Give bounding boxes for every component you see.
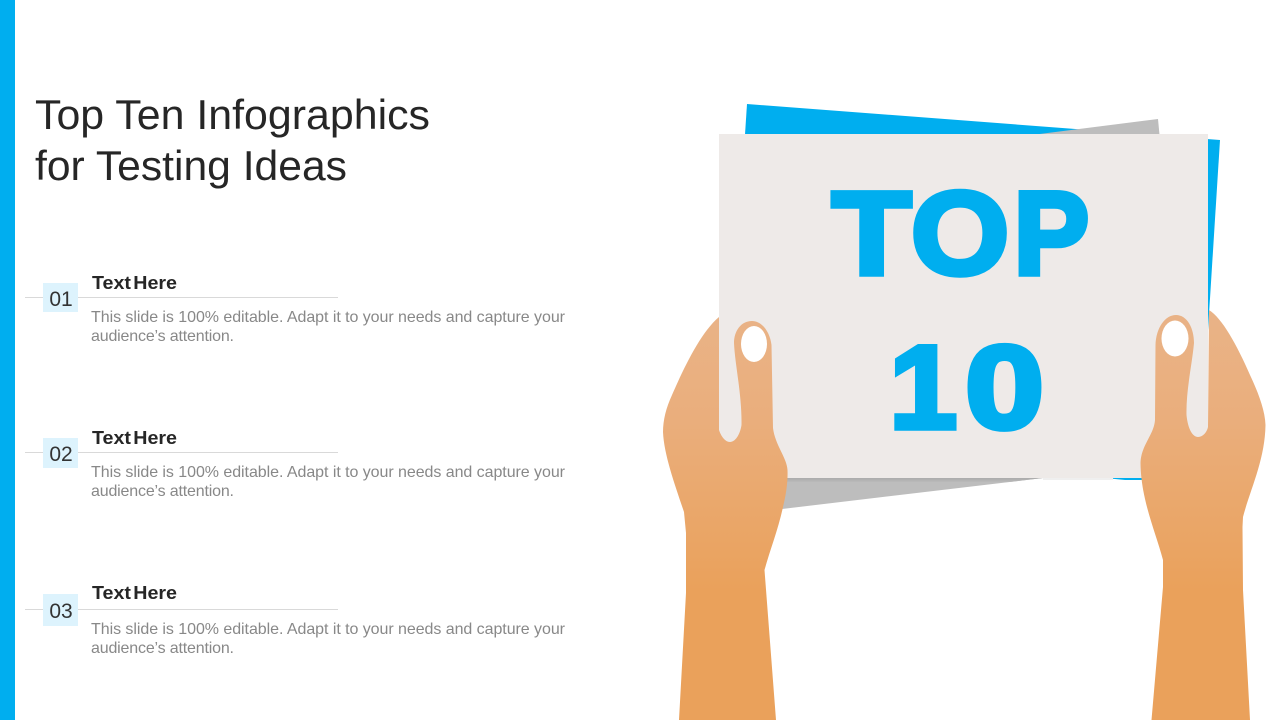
- list item 02: audience’s attention.: [91, 483, 234, 500]
- list item 01: This slide is 100% editable. Adapt it to your needs and capture your: [91, 309, 566, 326]
- list item 01: [25, 272, 566, 345]
- list item 01: Text Here: [92, 272, 177, 293]
- sign text: TOP: [832, 167, 1089, 300]
- list item 03: Text Here: [92, 582, 177, 603]
- blue back sheet: [725, 104, 1220, 480]
- list item 01: 01: [49, 288, 73, 311]
- illustration: hands holding sign: [663, 104, 1266, 720]
- list item 02: Text Here: [92, 427, 177, 448]
- right thumbnail: [1162, 320, 1188, 356]
- right hand: [1140, 310, 1266, 720]
- card shadow: [782, 478, 1043, 482]
- title: for Testing Ideas: [35, 142, 347, 189]
- list item 03: This slide is 100% editable. Adapt it to your needs and capture your: [91, 621, 566, 638]
- left accent bar: [0, 0, 15, 720]
- list item 03: 03: [49, 600, 73, 623]
- list item 02: [25, 427, 566, 500]
- grey back sheet: [760, 119, 1160, 509]
- list item 02: This slide is 100% editable. Adapt it to your needs and capture your: [91, 464, 566, 481]
- sign text: TOP: T: [832, 168, 911, 300]
- list item 03: audience’s attention.: [91, 640, 234, 657]
- list item 02: 02: [49, 443, 73, 466]
- title: Top Ten Infographics: [35, 91, 430, 138]
- sign card: [719, 134, 1208, 478]
- list item 03: [25, 582, 566, 657]
- sign text: TOP: P: [1014, 167, 1089, 300]
- sign text: 10: 1: [890, 323, 957, 454]
- sign text: 10: [890, 321, 1044, 454]
- left hand: [663, 317, 788, 720]
- list item 01: audience’s attention.: [91, 328, 234, 345]
- sign text: 10: 0: [965, 321, 1044, 453]
- soft shadow right of grey sheet: [1043, 478, 1113, 480]
- title: [35, 91, 430, 189]
- sign text: TOP: O: [911, 167, 1009, 299]
- left thumbnail: [741, 326, 767, 362]
